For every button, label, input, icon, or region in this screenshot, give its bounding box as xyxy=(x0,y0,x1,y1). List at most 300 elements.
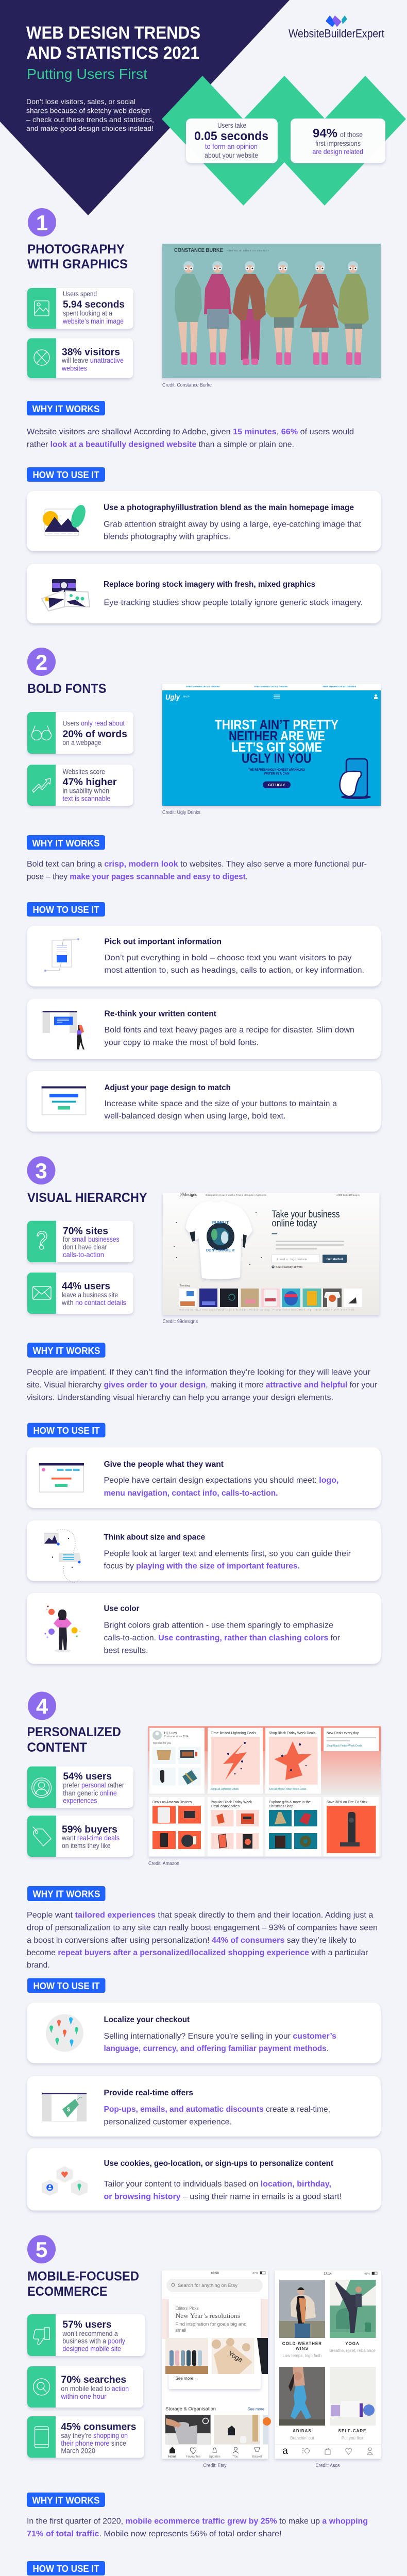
stat card: 47% higher: text is scannable xyxy=(63,794,110,802)
tip card: real-time offers xyxy=(27,2076,381,2137)
icon: cross circle xyxy=(34,350,49,365)
why it works text xyxy=(27,1368,378,1402)
badge: why it works xyxy=(27,1343,105,1358)
why it works text: rather look at a beautifully designed website than a simple or plain one. xyxy=(27,440,294,449)
screenshot: Ugly Drinks: WATER IN A CAN xyxy=(264,773,290,776)
icon: user in circle xyxy=(32,1778,52,1798)
badge: how to use it xyxy=(27,902,105,917)
screenshot: 99designs: Take your business xyxy=(272,1209,340,1220)
phone screenshot: Asos: Branchin’ out xyxy=(290,2436,314,2441)
row 1 cards: Top links for you xyxy=(152,1742,171,1745)
why it works text: visitors. Understanding visual hierarchy can help you arrange your design elements. xyxy=(27,1393,333,1402)
title: AND STATISTICS 2021 xyxy=(26,43,199,63)
intro paragraph xyxy=(26,98,154,132)
badge: how to use it: HOW TO USE IT xyxy=(33,1425,100,1436)
tip card: give the people what they want: menu navigation, contact info, calls-to-action. xyxy=(104,1489,278,1498)
badge: why it works: WHY IT WORKS xyxy=(33,1345,100,1356)
section 5 number xyxy=(27,2235,56,2263)
product: bottles xyxy=(165,2338,208,2374)
row 1 cards xyxy=(149,1728,379,1794)
why it works text xyxy=(27,1911,378,1970)
etsy nav bar: Favourites xyxy=(186,2455,200,2459)
screenshot: Constance Burke: PORTFOLIO ABOUT CV CONTACT xyxy=(227,250,269,252)
badge: how to use it: HOW TO USE IT xyxy=(33,1980,100,1991)
tip card: photography blend: Use a photography/illustration blend as the main homepage image xyxy=(104,503,354,512)
stat card: 94% xyxy=(291,118,385,163)
stat card: 5.94 seconds xyxy=(27,288,133,329)
phone screenshot: Etsy xyxy=(162,2270,271,2459)
stat card: 59% buyers: on items they like xyxy=(62,1842,111,1850)
section 5 heading xyxy=(27,2269,139,2299)
section 4 heading: CONTENT xyxy=(27,1740,87,1755)
screenshot: 99designs xyxy=(163,1192,379,1315)
phone screenshot: Asos: WINS xyxy=(296,2346,309,2351)
tip card: size and space: People look at larger text and elements first, so you can guide their xyxy=(104,1550,351,1558)
asos nav bar: a xyxy=(282,2446,288,2456)
figure 6 xyxy=(337,261,369,365)
icon: image xyxy=(35,301,49,316)
tip card: localize checkout xyxy=(27,2003,381,2063)
stat card: 45% consumers: their phone more since xyxy=(61,2439,126,2447)
image credits: Credit: Asos xyxy=(315,2463,340,2469)
stat card: 47% higher: in usability when xyxy=(63,787,109,794)
icon: website wireframe xyxy=(39,1463,84,1492)
logo: WebsiteBuilderExpert xyxy=(289,27,384,40)
intro paragraph: shares because of sketchy web design xyxy=(26,107,150,115)
icon: question mark xyxy=(37,1231,47,1249)
why it works text: In the first quarter of 2020, mobile ecommerce traffic grew by 25% to make up a whopping xyxy=(27,2517,368,2526)
why it works text: site. Visual hierarchy gives order to your design, making it more attractive and helpful for your xyxy=(27,1381,378,1389)
section 1 number: 1 xyxy=(36,211,48,235)
screenshot: Ugly Drinks: FREE SHIPPING ON ALL ORDERS xyxy=(186,685,220,688)
etsy nav bar: Home xyxy=(168,2455,177,2459)
screenshot: Constance Burke xyxy=(162,244,381,378)
row 1 cards: See all Black Friday Week Deals xyxy=(269,1788,307,1791)
stat card: 94%: 94% xyxy=(313,127,337,140)
row 2 cards xyxy=(149,1797,379,1857)
section 5 heading: ECOMMERCE xyxy=(27,2284,108,2299)
stat card: 5.94 seconds: Users spend xyxy=(63,290,97,298)
section 1 number xyxy=(28,208,56,236)
stat card: 44% users: leave a business site xyxy=(62,1291,118,1299)
figure 5 xyxy=(298,261,339,365)
stat card: 59% buyers xyxy=(27,1816,133,1857)
badge: why it works xyxy=(27,401,105,415)
stat card: 38% visitors: 38% visitors xyxy=(62,347,120,358)
tip card: cookies and personalization xyxy=(27,2148,381,2210)
intro paragraph: – check out these trends and statistics, xyxy=(26,116,154,124)
image credit: Credit: Ugly Drinks xyxy=(162,809,200,816)
stat card: 0.05 seconds: about your website xyxy=(205,151,258,159)
stat card: 0.05 seconds xyxy=(186,118,278,163)
badge: how to use it xyxy=(27,1423,105,1437)
figure 4 xyxy=(265,261,300,365)
stat card: 59% buyers: want real-time deals xyxy=(61,1834,120,1842)
figure 2 xyxy=(204,261,232,365)
stat card: 38% visitors xyxy=(27,338,133,378)
row 1 cards: Shop Black Friday Week Deals xyxy=(327,1744,362,1748)
stat card: 20% of words: on a webpage xyxy=(63,739,101,747)
tip card: adjust page design: Adjust your page design to match xyxy=(104,1083,231,1092)
tip card: photography blend: blends photography with graphics. xyxy=(104,533,230,541)
icon: envelope xyxy=(33,1286,51,1299)
screenshot: 99designs: Categories How it works Find a designer Agencies xyxy=(206,1194,267,1196)
tip card: give the people what they want: People have certain design expectations you should meet: logo, xyxy=(104,1476,338,1485)
stat card: 45% consumers: 45% consumers xyxy=(61,2422,136,2433)
stat card: 70% searches: 70% searches xyxy=(61,2375,126,2385)
badge: how to use it xyxy=(27,1978,105,1993)
subtitle: Putting Users First xyxy=(27,66,147,82)
tip card: photography blend: Grab attention straight away by using a large, eye-catching image that xyxy=(104,520,362,529)
t-shirt xyxy=(185,1201,252,1279)
phone screenshot: Asos: SELF-CARE xyxy=(338,2429,366,2433)
tip card: important information: most attention to, such as headings, calls to action, or key information. xyxy=(104,966,364,975)
phone screenshot: Etsy: See more → xyxy=(175,2376,198,2381)
section 2 number: 2 xyxy=(36,650,47,674)
image credit: Credit: Constance Burke xyxy=(162,382,212,388)
tip card: adjust page design: well-balanced design when using large, bold text. xyxy=(104,1112,285,1121)
stat card: 54% users: experiences xyxy=(63,1797,97,1805)
why it works text: become repeat buyers after a personalized/localized shopping experience with a particular xyxy=(27,1948,368,1957)
badge: why it works xyxy=(27,835,105,850)
stat card: 45% consumers: say they’re shopping on xyxy=(61,2432,128,2439)
icon: tag xyxy=(33,1827,51,1846)
tip card: replace stock imagery xyxy=(27,564,381,623)
icon: map pins xyxy=(46,2014,83,2052)
tip card: real-time offers: Pop-ups, emails, and automatic discounts create a real-time, xyxy=(104,2105,330,2114)
badge: why it works: WHY IT WORKS xyxy=(32,403,100,414)
badge: how to use it: HOW TO USE IT xyxy=(33,904,99,915)
why it works text xyxy=(27,2517,368,2538)
badge: why it works: WHY IT WORKS xyxy=(32,838,100,849)
stat card: 57% users: won’t recommend a xyxy=(62,2330,118,2337)
why it works text: a boost in conversions after using personalization! 44% of consumers say they’re likely to xyxy=(27,1936,357,1945)
icon: trend arrow xyxy=(32,778,50,792)
section 3 number xyxy=(27,1156,56,1184)
tip card: important information xyxy=(27,926,381,987)
stat card: 57% users xyxy=(27,2314,145,2356)
phone screenshot: Asos: YOGA xyxy=(345,2342,360,2346)
tip card: important information: Pick out important information xyxy=(104,938,222,946)
stat card: 70% sites xyxy=(27,1221,133,1262)
stat card: 38% visitors: will leave unattractive xyxy=(61,357,124,364)
icon: phone xyxy=(35,2427,48,2448)
screenshot: 99designs: I need a... logo, website xyxy=(277,1258,307,1261)
stat card: 5.94 seconds: website’s main image xyxy=(62,317,124,325)
tip card: important information: Don’t put everything in bold – choose text you want visitors to pay xyxy=(104,954,351,962)
screenshot: Ugly Drinks: FREE SHIPPING ON ALL ORDERS xyxy=(255,685,288,688)
screenshot: Ugly Drinks: FREE SHIPPING ON ALL ORDERS xyxy=(323,685,357,688)
phone screenshot: Etsy: See more xyxy=(248,2407,265,2411)
phone screenshot: Asos: ADIDAS xyxy=(293,2429,312,2433)
row 1 cards: Shop Black Friday Week Deals xyxy=(269,1732,315,1735)
tip card: real-time offers: Provide real-time offers xyxy=(104,2089,193,2097)
screenshot: Ugly Drinks xyxy=(162,684,381,806)
phone screenshot: Asos: Breathe, reset, rebalance xyxy=(329,2348,376,2353)
tip card: localize checkout: Selling internationally? Ensure you’re selling in your customer’s xyxy=(104,2032,336,2041)
icon: elements with dotted path xyxy=(44,1530,81,1582)
image credit: Credit: Amazon xyxy=(148,1860,179,1867)
stat card: 38% visitors: websites xyxy=(61,365,87,372)
why it works text: People are impatient. If they can’t find the information they’re looking for they will leave your xyxy=(27,1368,371,1377)
section 1 heading: PHOTOGRAPHY xyxy=(27,242,125,257)
phone screenshot: Asos: 47% xyxy=(364,2273,370,2276)
stat card: 54% users: prefer personal rather xyxy=(63,1782,124,1789)
image credits: Credit: Etsy xyxy=(203,2463,227,2469)
screenshot: 99designs: online today xyxy=(272,1218,317,1229)
tip card: adjust page design: Increase white space and the size of your buttons to maintain a xyxy=(104,1099,337,1108)
tip card: use color: calls-to-action. Use contrasting, rather than clashing colors for xyxy=(104,1634,341,1642)
screenshot: 99designs: 1 800 513 1678 Log in xyxy=(336,1194,360,1196)
etsy nav bar: Updates xyxy=(209,2455,221,2459)
etsy nav bar: You xyxy=(233,2455,238,2459)
icon: thumbs down xyxy=(33,2328,49,2345)
stat card: 44% users: 44% users xyxy=(62,1281,110,1292)
section 3 heading: VISUAL HIERARCHY xyxy=(27,1191,147,1205)
phone screenshot: Etsy: Find inspiration for goals big and xyxy=(175,2321,246,2327)
row 1 cards: Shop all Lightning Deals xyxy=(211,1788,239,1791)
logo xyxy=(289,15,384,40)
stat card: 70% sites: 70% sites xyxy=(63,1226,108,1236)
stat card: 70% searches: on mobile lead to action xyxy=(61,2385,129,2393)
row 1 cards: Customer since 2014 xyxy=(164,1735,189,1738)
phone screenshot: Etsy: 37% xyxy=(252,2272,258,2275)
stat card: 47% higher xyxy=(27,765,133,806)
header panel: dark navy shape xyxy=(0,0,290,215)
row 1 cards: Time-limited Lightning Deals xyxy=(211,1732,256,1735)
can with tongue xyxy=(340,759,371,799)
tip card: re-think content xyxy=(27,999,381,1059)
stat card: 70% searches: within one hour xyxy=(60,2393,107,2400)
phone screenshot: Asos: Put you first xyxy=(342,2436,364,2441)
t-shirt: DON'T SHAKE IT xyxy=(206,1249,235,1252)
stat card: 44% users: with no contact details xyxy=(61,1299,126,1307)
icon: magnifier xyxy=(33,2379,50,2395)
screenshot: Constance Burke: CONSTANCE BURKE xyxy=(174,247,223,253)
tip card: use color xyxy=(27,1593,381,1664)
why it works text xyxy=(27,428,354,449)
tip card: use color: best results. xyxy=(104,1647,148,1655)
badge: how to use it xyxy=(27,467,105,482)
green diamond pattern xyxy=(162,76,406,206)
phone screenshot: Etsy: Search for anything on Etsy xyxy=(178,2283,238,2289)
tip card: re-think content: Re-think your written content xyxy=(104,1009,217,1018)
stat card: 94%: of those xyxy=(340,131,363,139)
row 2 cards: Christmas Shop xyxy=(269,1805,293,1808)
row 2 cards: Deals on Amazon Devices xyxy=(152,1801,192,1804)
image credit: Credit: 99designs xyxy=(163,1318,198,1325)
section 4 number: 4 xyxy=(36,1694,48,1719)
stat card: 5.94 seconds: 5.94 seconds xyxy=(63,299,125,310)
trending thumbnails xyxy=(179,1289,362,1311)
badge: how to use it: HOW TO USE IT xyxy=(33,2563,99,2574)
stat card: 70% searches xyxy=(27,2366,143,2408)
stat card: 44% users xyxy=(27,1273,133,1314)
stat card: 20% of words: 20% of words xyxy=(63,729,127,740)
stat card: 45% consumers: March 2020 xyxy=(61,2447,95,2455)
tip card: re-think content: Bold fonts and text heavy pages are a recipe for disaster. Slim down xyxy=(104,1026,354,1035)
screenshot: Ugly Drinks: GIT UGLY xyxy=(268,784,285,787)
section 3 number: 3 xyxy=(35,1159,47,1183)
stat card: 20% of words xyxy=(27,712,133,754)
section 4 number xyxy=(28,1692,56,1720)
row 1 cards: New Deals every day xyxy=(327,1732,359,1735)
badge: why it works xyxy=(27,1886,105,1901)
screenshot: Amazon xyxy=(148,1726,381,1857)
why it works text: Website visitors are shallow! According to Adobe, given 15 minutes, 66% of users would xyxy=(27,428,354,436)
badge: how to use it: HOW TO USE IT xyxy=(33,469,99,480)
screenshot: 99designs: Trending xyxy=(180,1284,190,1287)
stat card: 54% users xyxy=(27,1767,133,1808)
stat card: 54% users: than generic online xyxy=(63,1789,117,1797)
figure 3 xyxy=(232,261,266,365)
phone screenshot: Asos: 17:14 xyxy=(324,2273,332,2276)
figure 1 xyxy=(175,261,202,365)
icon: hexagons xyxy=(42,2166,88,2196)
section 4 heading xyxy=(27,1725,121,1755)
phone screenshot: Asos: Low temps, high fash xyxy=(283,2353,321,2358)
stat card: 0.05 seconds: Users take xyxy=(217,122,246,129)
tip card: adjust page design xyxy=(27,1071,381,1131)
icon: browser layout xyxy=(42,1086,86,1115)
stat card: 45% consumers xyxy=(27,2416,144,2458)
tip card: cookies and personalization: or browsing history – using their name in emails is a good start! xyxy=(104,2193,342,2201)
section 5 number: 5 xyxy=(36,2238,47,2262)
product row xyxy=(165,2415,271,2445)
section 2 heading: BOLD FONTS xyxy=(27,682,106,696)
stat card: 57% users: 57% users xyxy=(62,2319,112,2330)
stat card: 47% higher: Websites score xyxy=(63,768,105,776)
why it works text: drop of personalization to any site can really boost engagement – 93% of companies have seen xyxy=(27,1923,378,1932)
tip card: localize checkout: Localize your checkout xyxy=(104,2015,190,2024)
why it works text: People want tailored experiences that speak directly to them and their location. Adding just a xyxy=(27,1911,373,1920)
row 2 cards: Deal categories xyxy=(211,1805,240,1808)
stat card: 0.05 seconds: 0.05 seconds xyxy=(194,129,268,143)
stat card: 0.05 seconds: to form an opinion xyxy=(205,142,258,150)
badge: why it works: WHY IT WORKS xyxy=(32,2495,100,2505)
tip card: size and space: focus by playing with the size of important features. xyxy=(104,1562,300,1571)
stat card: 70% sites: for small businesses xyxy=(63,1235,120,1243)
t-shirt: PUMP IT xyxy=(212,1221,229,1225)
why it works text: Bold text can bring a crisp, modern look to websites. They also serve a more functional pur- xyxy=(27,860,367,869)
tip card: cookies and personalization: Use cookies, geo-location, or sign-ups to personalize content xyxy=(104,2159,334,2168)
tip card: use color: Use color xyxy=(104,1604,139,1613)
tip card: replace stock imagery: Eye-tracking studies show people totally ignore generic stock imagery. xyxy=(104,598,363,607)
tip card: size and space xyxy=(27,1520,381,1582)
photo: adidas xyxy=(279,2367,325,2426)
product: yoga board xyxy=(212,2338,255,2374)
section 1 heading xyxy=(27,242,128,272)
badge: why it works: WHY IT WORKS xyxy=(33,1889,100,1900)
tip card: replace stock imagery: Replace boring stock imagery with fresh, mixed graphics xyxy=(104,580,315,589)
icon: mountain picture with leaf xyxy=(43,503,88,536)
stat card: 57% users: business with a poorly xyxy=(62,2337,125,2345)
intro paragraph: Don’t lose visitors, sales, or social xyxy=(26,98,135,106)
stat card: 70% sites: don’t have clear xyxy=(63,1243,107,1251)
etsy nav bar xyxy=(168,2447,262,2459)
row 2 cards: Explore gifts & more in the xyxy=(269,1801,311,1804)
photo: self-care xyxy=(330,2367,376,2426)
screenshot: Ugly Drinks: THIRST AIN’T PRETTY xyxy=(215,717,338,733)
phone screenshot: Etsy: 08:58 xyxy=(211,2272,219,2275)
tip card: localize checkout: language, currency, and offering familiar payment methods. xyxy=(104,2044,329,2053)
phone screenshot: Asos: COLD-WEATHER xyxy=(282,2342,322,2346)
phone screenshot: Etsy: New Year’s resolutions xyxy=(175,2312,240,2319)
phone screenshot: Etsy: small xyxy=(175,2328,186,2333)
badge: how to use it xyxy=(27,2561,105,2575)
stat card: 20% of words: Users only read about xyxy=(63,720,125,727)
title: WEB DESIGN TRENDS xyxy=(26,23,200,43)
section 1 heading: WITH GRAPHICS xyxy=(27,257,128,272)
screenshot: Ugly Drinks: UGLY IN YOU xyxy=(242,750,311,766)
stat card: 94%: are design related xyxy=(312,147,363,156)
screenshot: 99designs: See creativity at work xyxy=(276,1266,303,1269)
stat card: 5.94 seconds: spent looking at a xyxy=(63,309,112,317)
section 5 heading: MOBILE-FOCUSED xyxy=(27,2269,139,2284)
screenshot: Ugly Drinks: LET’S GIT SOME xyxy=(231,739,322,755)
badge: why it works xyxy=(27,2493,105,2507)
stat card: 94%: first impressions xyxy=(315,140,361,147)
why it works text: pose – they make your pages scannable and easy to digest. xyxy=(27,872,248,881)
row 1 cards: Hi, Lucy xyxy=(164,1732,177,1735)
stat card: 59% buyers: 59% buyers xyxy=(62,1824,117,1835)
screenshot: Ugly Drinks: Ugly xyxy=(165,693,180,702)
section 4 heading: PERSONALIZED xyxy=(27,1725,121,1739)
why it works text: 71% of total traffic. Mobile now represents 56% of total order share! xyxy=(27,2530,282,2538)
icon: woman and colored dots xyxy=(44,1605,80,1652)
screenshot: 99designs: 99designs xyxy=(180,1192,197,1197)
etsy nav bar: Basket xyxy=(252,2455,262,2459)
phone screenshot: Etsy: Editors’ Picks xyxy=(175,2306,199,2311)
title xyxy=(26,23,200,63)
photo: yoga xyxy=(330,2280,376,2338)
tip card: real-time offers: personalized customer experience. xyxy=(104,2118,232,2127)
phone screenshot: Etsy: Storage & Organisation xyxy=(165,2406,216,2411)
product: yoga board: Yoga xyxy=(227,2349,244,2364)
icon: camera and photos xyxy=(42,579,90,611)
image credits xyxy=(203,2463,340,2469)
icon: browser and woman xyxy=(43,1011,84,1049)
tip card: cookies and personalization: Tailor your content to individuals based on location, birthday, xyxy=(104,2180,331,2189)
why it works text: brand. xyxy=(27,1961,50,1970)
stat card: 70% sites: calls-to-action xyxy=(63,1251,104,1259)
tip card: use color: Bright colors grab attention - use them sparingly to emphasize xyxy=(104,1621,333,1630)
stat card: 54% users: 54% users xyxy=(63,1771,112,1782)
tip card: photography blend xyxy=(27,491,381,551)
screenshot: Ugly Drinks: NEITHER ARE WE xyxy=(229,728,325,743)
photo: cold weather xyxy=(279,2280,325,2338)
screenshot: Ugly Drinks: THE REFRESHINGLY HONEST SPARKLING xyxy=(248,769,305,772)
section 2 number xyxy=(27,648,56,676)
row 2 cards: Save 38% on Fire TV Stick xyxy=(327,1801,367,1804)
icon: browser with price tag: $ xyxy=(67,2107,70,2113)
phone screenshot: Asos xyxy=(275,2270,381,2459)
intro paragraph: and make good design choices instead! xyxy=(26,125,154,132)
stat card: 57% users: designed mobile site xyxy=(62,2345,121,2352)
icon: browser with price tag xyxy=(42,2093,87,2122)
row 2 cards: Popular Black Friday Week xyxy=(211,1801,252,1804)
trending thumbnails: Website builders Side page design Logo & brand id.. Product packag.. Product label Illustration or gr.. Book cover T-shirt Show more xyxy=(179,1309,355,1311)
screenshot: Ugly Drinks: SHOP xyxy=(183,696,190,698)
tip card: size and space: Think about size and space xyxy=(104,1533,205,1541)
icon: document xyxy=(44,938,79,972)
icon: glasses xyxy=(32,726,52,740)
stat card: 47% higher: 47% higher xyxy=(63,777,117,788)
tip card: re-think content: your copy to make the most of bold fonts. xyxy=(104,1039,259,1047)
tip card: give the people what they want xyxy=(27,1447,381,1508)
asos nav bar xyxy=(275,2444,381,2456)
screenshot: 99designs: Get started xyxy=(327,1258,343,1261)
